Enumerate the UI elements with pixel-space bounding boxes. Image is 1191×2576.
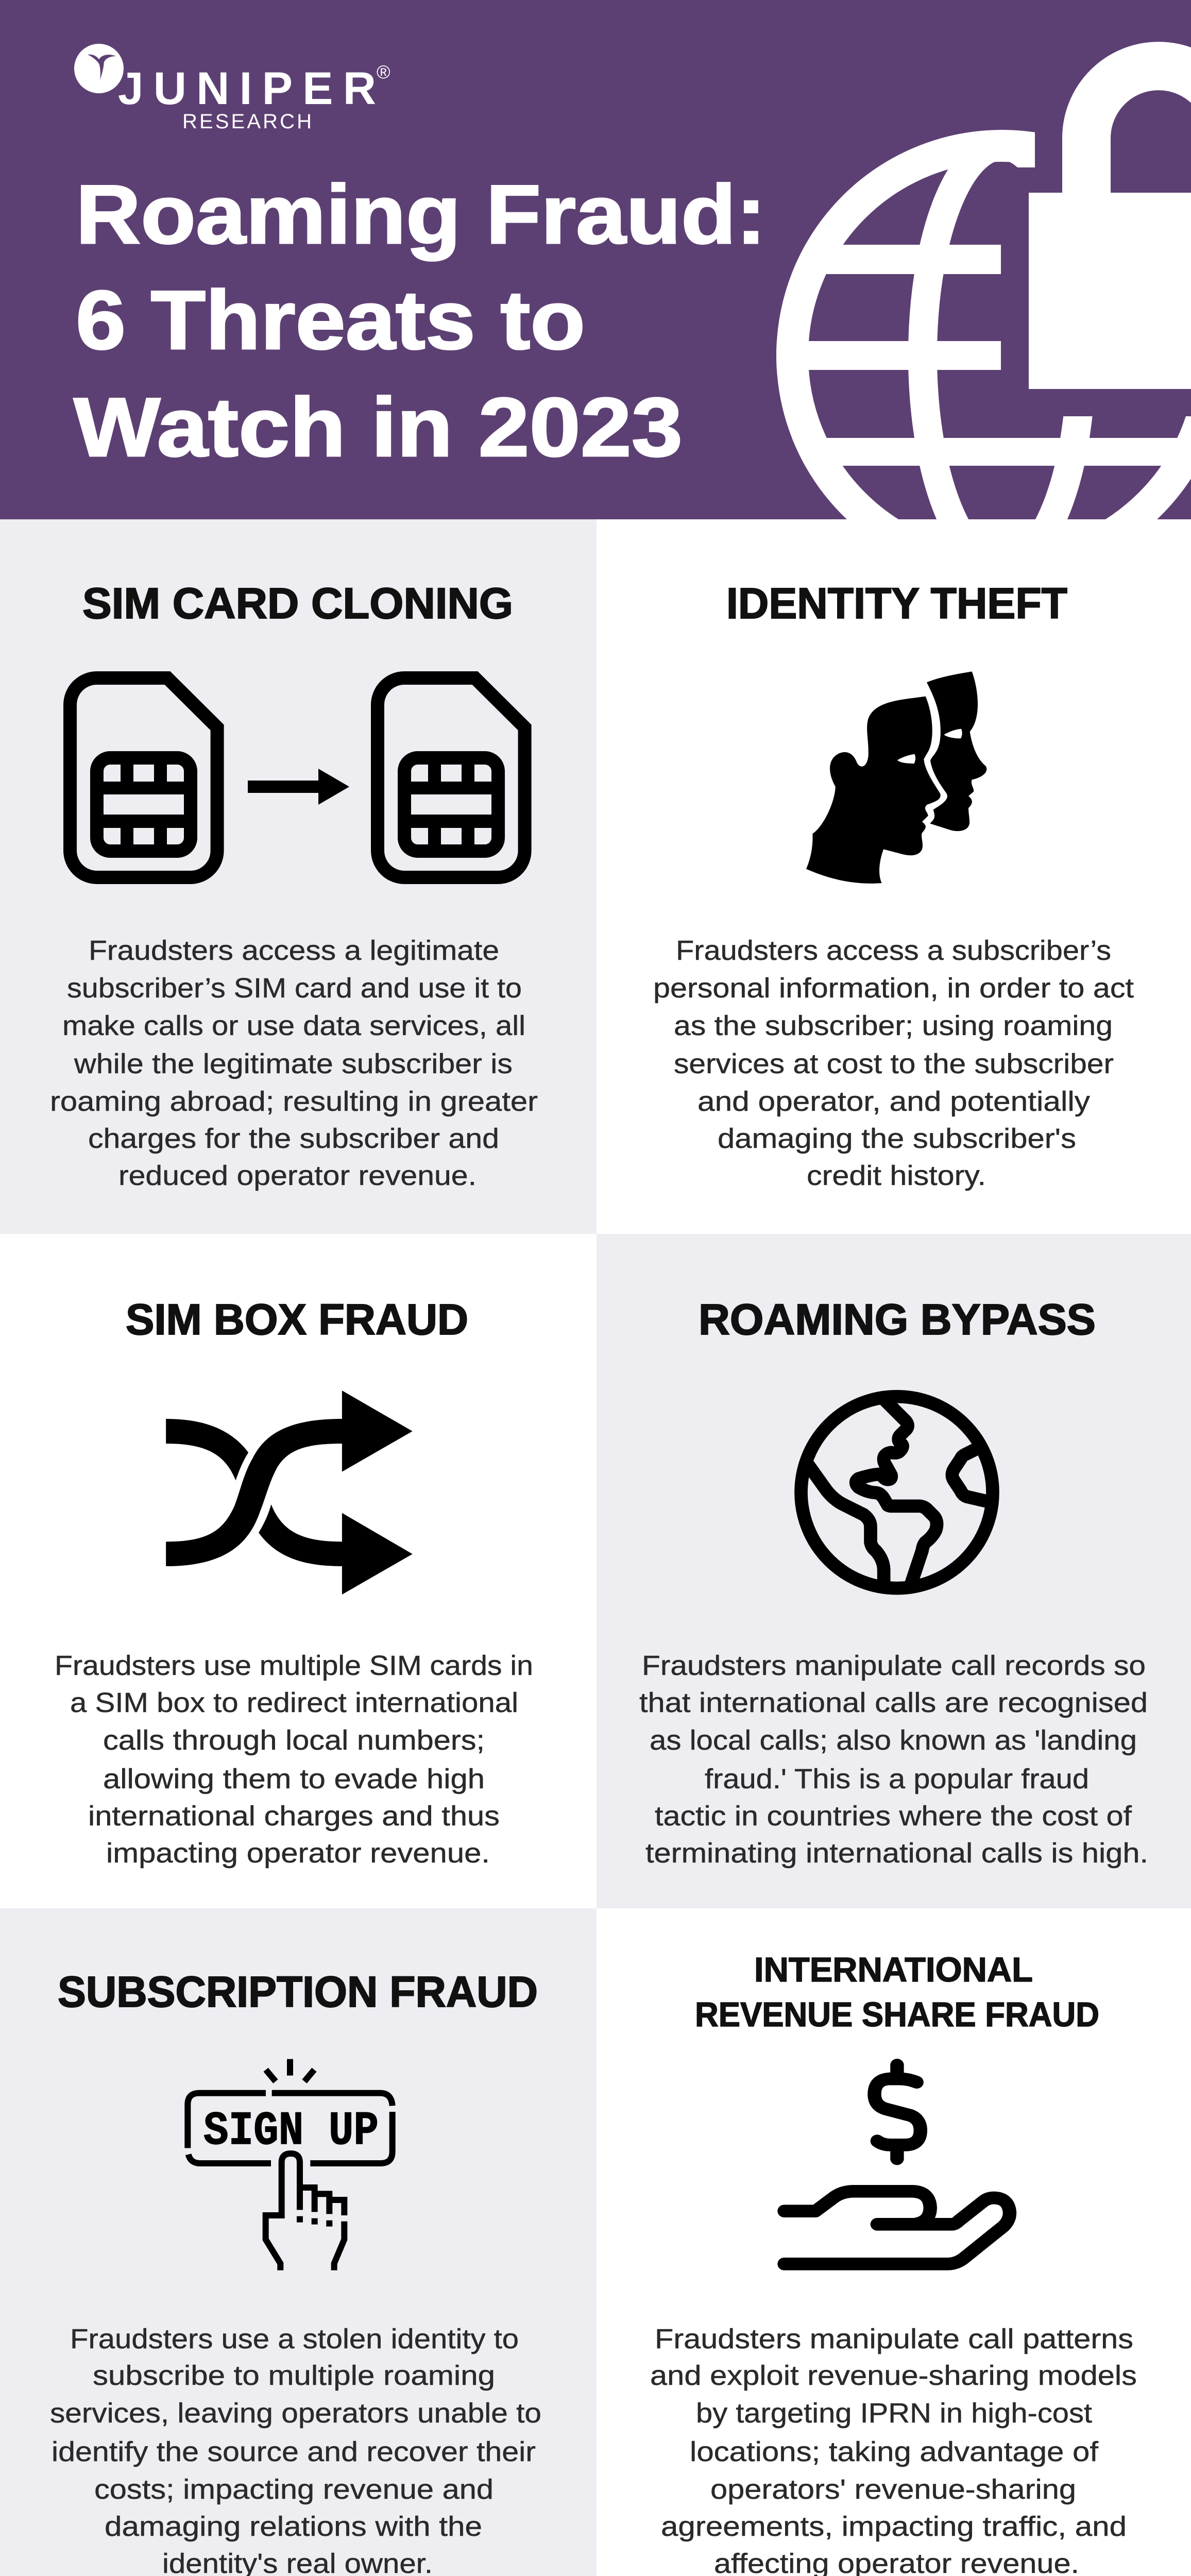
icon: globe with padlock [773, 66, 1191, 565]
text: SIM box fraud description: a SIM box to redirect international [70, 1687, 518, 1718]
text: subscription fraud description: subscribe to multiple roaming [93, 2360, 495, 2391]
logo: Juniper Research header: ® [377, 61, 390, 82]
panel: SIM box fraud [55, 1295, 533, 1869]
text: SIM box fraud description: Fraudsters use multiple SIM cards in [55, 1650, 533, 1681]
text: roaming bypass description: terminating international calls is high. [645, 1838, 1148, 1869]
text: SIM box fraud description: impacting operator revenue. [106, 1838, 490, 1869]
text: SIM box fraud description: allowing them to evade high [103, 1764, 485, 1794]
panel: header [0, 0, 1191, 565]
text: roaming bypass description: that international calls are recognised [639, 1687, 1148, 1718]
text: roaming bypass description [639, 1650, 1148, 1869]
text: international revenue share fraud description: locations; taking advantage of [690, 2436, 1099, 2467]
text: identity theft description: services at cost to the subscriber [674, 1048, 1114, 1079]
text: roaming bypass description: Fraudsters manipulate call records so [642, 1650, 1146, 1681]
text: SIM box fraud description: international charges and thus [88, 1801, 500, 1832]
text: SIM card cloning description: Fraudsters access a legitimate [89, 935, 499, 966]
text: identity theft description: Fraudsters access a subscriber’s [676, 935, 1111, 966]
text: SIM card cloning description: roaming abroad; resulting in greater [50, 1086, 538, 1117]
text: identity theft description: as the subscriber; using roaming [674, 1010, 1113, 1041]
icon: two SIM cards with arrow [70, 678, 525, 877]
panel: SIM card cloning [0, 519, 597, 1234]
text: identity theft description: and operator, and potentially [697, 1086, 1090, 1117]
text: SIM card cloning description: subscriber’s SIM card and use it to [67, 973, 522, 1004]
heading: subscription fraud: SUBSCRIPTION FRAUD [58, 1968, 538, 2016]
text: international revenue share fraud description: by targeting IPRN in high-cost [696, 2398, 1092, 2429]
text: roaming bypass description: fraud.' This is a popular fraud [705, 1764, 1089, 1794]
text: SIM card cloning description [50, 935, 538, 1191]
text: SIM card cloning description: while the legitimate subscriber is [74, 1048, 513, 1079]
heading: international revenue share fraud [695, 1951, 1099, 2034]
logo: Juniper Research header [74, 44, 390, 133]
heading: international revenue share fraud: INTERNATIONAL [754, 1951, 1033, 1989]
text: international revenue share fraud description: and exploit revenue-sharing models [650, 2360, 1137, 2391]
panel: international revenue share fraud [650, 1951, 1137, 2576]
logo: Juniper Research header: RESEARCH [182, 110, 312, 133]
text: identity theft description: damaging the subscriber's [718, 1123, 1076, 1154]
heading: roaming bypass: ROAMING BYPASS [699, 1295, 1096, 1344]
title: 6 Threats to [76, 274, 585, 367]
text: subscription fraud description: costs; impacting revenue and [94, 2474, 494, 2505]
panel: identity theft [653, 579, 1134, 1191]
text: international revenue share fraud description: Fraudsters manipulate call patterns [655, 2324, 1133, 2354]
text: subscription fraud description: Fraudsters use a stolen identity to [70, 2324, 519, 2354]
text: identity theft description [653, 935, 1134, 1191]
icon: sign up button with pointing hand [188, 2059, 393, 2270]
heading: SIM card cloning: SIM CARD CLONING [82, 579, 513, 628]
icon: two face silhouettes [806, 671, 986, 884]
text: SIM card cloning description: charges for the subscriber and [88, 1123, 499, 1154]
heading: identity theft: IDENTITY THEFT [726, 579, 1067, 628]
text: subscription fraud description: services, leaving operators unable to [50, 2398, 541, 2429]
text: identity theft description: credit history. [807, 1160, 986, 1191]
title: Roaming Fraud: [76, 168, 766, 261]
icon: shuffle arrows [166, 1391, 413, 1595]
text: international revenue share fraud description: operators' revenue-sharing [710, 2474, 1076, 2505]
panel: roaming bypass [597, 1234, 1191, 1908]
text: SIM box fraud description: calls through local numbers; [103, 1725, 485, 1756]
text: subscription fraud description [50, 2324, 541, 2576]
text: subscription fraud description: damaging relations with the [105, 2511, 482, 2542]
text: roaming bypass description: as local calls; also known as 'landing [650, 1725, 1137, 1756]
text: international revenue share fraud description [650, 2324, 1137, 2576]
title [74, 168, 766, 474]
text: SIM box fraud description [55, 1650, 533, 1869]
text: SIM card cloning description: make calls or use data services, all [62, 1010, 525, 1041]
heading: SIM box fraud: SIM BOX FRAUD [126, 1295, 468, 1344]
text: international revenue share fraud description: agreements, impacting traffic, and [661, 2511, 1127, 2542]
title: Watch in 2023 [74, 381, 683, 474]
icon: dollar over open hand [784, 2065, 1010, 2264]
logo: Juniper Research header: JUNIPER [118, 62, 376, 114]
text: roaming bypass description: tactic in countries where the cost of [655, 1801, 1132, 1832]
text: SIM card cloning description: reduced operator revenue. [118, 1160, 477, 1191]
panel: subscription fraud [0, 1908, 597, 2576]
icon: sign up button with pointing hand: SIGN UP [203, 2104, 379, 2158]
icon: earth globe [801, 1397, 993, 1588]
text: identity theft description: personal information, in order to act [653, 973, 1134, 1004]
heading: international revenue share fraud: REVENUE SHARE FRAUD [695, 1995, 1099, 2034]
text: subscription fraud description: identify the source and recover their [52, 2436, 536, 2467]
